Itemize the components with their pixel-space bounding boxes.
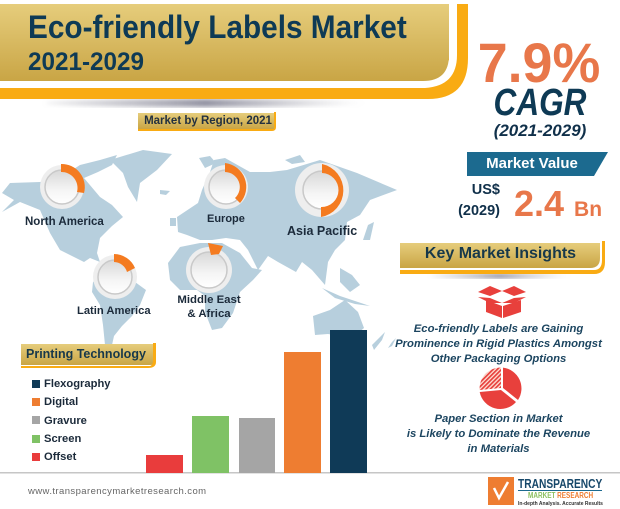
donut: Asia Pacific <box>295 163 349 217</box>
legend: Gravure <box>44 415 87 427</box>
logo market research: MARKET RESEARCH <box>528 491 593 500</box>
insight: paper section: Paper Section in Market <box>434 413 563 425</box>
donut: North America <box>40 164 85 209</box>
market value figure: 2.4 Bn <box>514 183 602 224</box>
heading: key market insights: Key Market Insights <box>425 245 576 262</box>
insight: paper section: in Materials <box>467 443 530 455</box>
world map <box>2 150 397 350</box>
insight: rigid plastics <box>395 323 602 365</box>
legend: Offset <box>44 451 76 463</box>
label: europe: Europe <box>207 213 245 225</box>
currency label <box>458 182 500 218</box>
currency label: (2029) <box>458 202 500 218</box>
cagr value: 7.9% <box>478 31 600 94</box>
label: middle east and africa: Middle East <box>177 294 241 306</box>
bar chart: printing technology <box>146 330 367 473</box>
legend: Flexography <box>44 378 111 390</box>
legend: Digital <box>44 396 78 408</box>
title banner <box>0 4 468 107</box>
label: middle east and africa: & Africa <box>187 308 231 320</box>
logo icon <box>488 477 514 505</box>
icon: pie chart <box>480 367 521 409</box>
cagr years: (2021-2029) <box>494 121 586 140</box>
heading: market value: Market Value <box>486 155 578 172</box>
donut: Latin America <box>93 254 137 299</box>
heading: printing technology: Printing Technology <box>26 347 146 361</box>
insight: rigid plastics: Other Packaging Options <box>431 353 566 365</box>
label background: key market insights <box>400 241 605 278</box>
donut: Europe <box>204 163 248 209</box>
currency label: US$ <box>472 182 500 198</box>
insight: rigid plastics: Prominence in Rigid Plastics Amongst <box>395 338 602 350</box>
cagr label: CAGR <box>494 82 586 124</box>
label: asia pacific: Asia Pacific <box>287 224 357 238</box>
legend swatches <box>32 380 40 461</box>
label: latin america: Latin America <box>77 305 151 317</box>
baseline <box>0 472 620 474</box>
market value ribbon <box>467 152 608 176</box>
region labels: North America <box>25 216 104 228</box>
website: www.transparencymarketresearch.com <box>28 486 206 497</box>
legend <box>44 378 111 463</box>
label background: market by region <box>138 112 276 131</box>
logo rule <box>518 490 602 491</box>
logo wordmark: TRANSPARENCY <box>518 476 602 491</box>
heading: market by region: Market by Region, 2021 <box>144 115 272 127</box>
insight: rigid plastics: Eco-friendly Labels are Gaining <box>414 323 583 335</box>
logo tagline: In-depth Analysis. Accurate Results <box>518 501 603 507</box>
icon: open box <box>478 286 526 318</box>
insight: paper section: is Likely to Dominate the Revenue <box>407 428 590 440</box>
donut: Middle East & Africa <box>186 243 232 293</box>
subtitle: 2021-2029 <box>28 48 144 76</box>
label: middle east and africa <box>177 294 241 320</box>
legend: Screen <box>44 433 81 445</box>
insight: paper section <box>407 413 590 455</box>
label background: printing technology <box>21 343 156 368</box>
title: Eco-friendly Labels Market <box>28 9 407 45</box>
